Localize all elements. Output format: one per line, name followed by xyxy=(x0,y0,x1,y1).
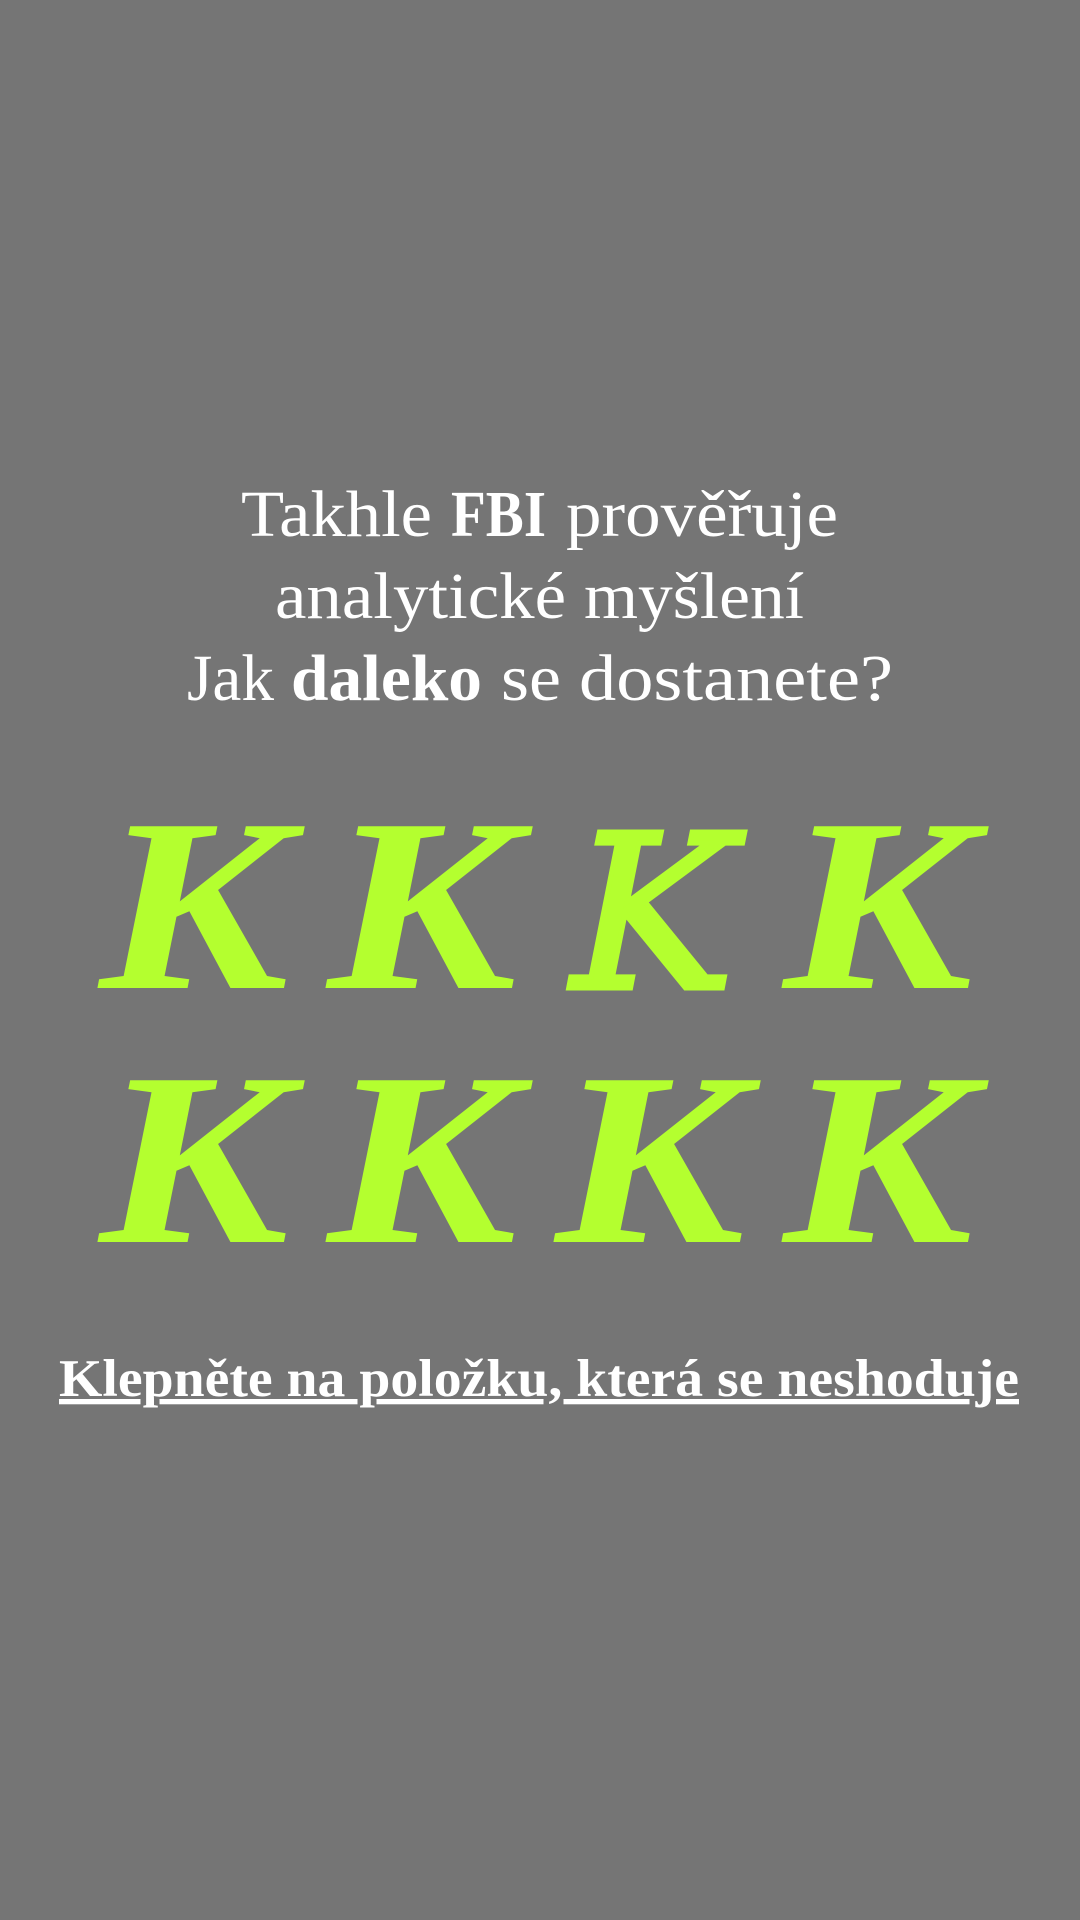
letter grid: row 1 and row 2 xyxy=(95,768,992,1296)
title: daleko xyxy=(291,642,482,715)
title: Takhle xyxy=(241,478,432,551)
title: analytické xyxy=(275,560,566,633)
letter K row 1 col 1: K xyxy=(95,768,308,1042)
letter K row 1 col 2: K xyxy=(323,768,536,1042)
title: Jak xyxy=(187,642,274,715)
title: prověřuje xyxy=(566,478,838,551)
title: dostanete? xyxy=(579,642,893,715)
call to action: Klepněte na položku, která se neshoduje xyxy=(59,1350,1019,1408)
letter K row 2 col 4: K xyxy=(779,1022,992,1296)
title xyxy=(187,478,893,715)
letter K row 1 col 4: K xyxy=(779,768,992,1042)
letter K row 2 col 3: K xyxy=(551,1022,764,1296)
title: FBI xyxy=(451,478,546,551)
odd letter K row 1 col 3: K xyxy=(568,789,745,1039)
letter K row 2 col 2: K xyxy=(323,1022,536,1296)
letter K row 2 col 1: K xyxy=(95,1022,308,1296)
title: se xyxy=(501,642,561,715)
title: myšlení xyxy=(584,560,804,633)
